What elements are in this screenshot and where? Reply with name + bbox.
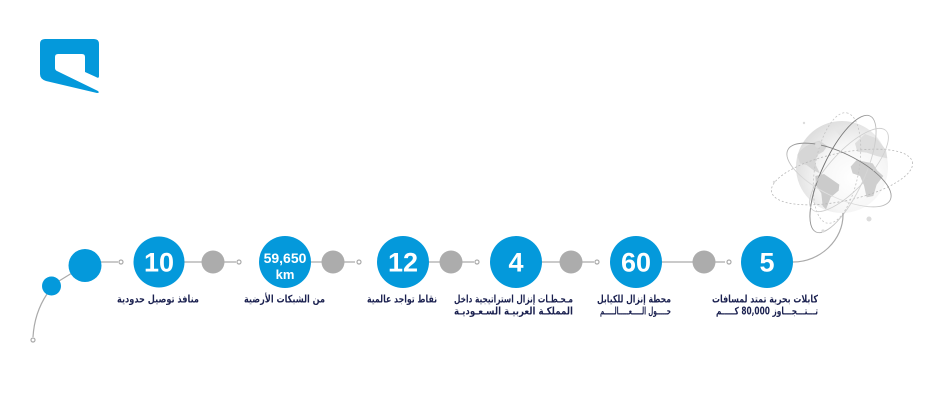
gray nodes [202,250,716,274]
stat: 60: محطة إنزال للكيابل [597,294,671,306]
stat: 4: 4 [508,248,524,278]
stat: 4 [454,236,573,318]
globe illustration [767,107,917,241]
stat: 60 [597,236,671,318]
stat: 5 [712,236,819,318]
connector: first circle to globe [793,213,843,262]
stat: 5: كابلات بحرية تمتد لمسافات [712,294,819,306]
stat: 59,650 km: km [276,267,294,282]
start node small [42,276,61,296]
stat: 10: منافذ توصيل حدودية [117,294,199,306]
globe sphere [796,121,888,213]
stat: 60: 60 [621,248,651,278]
connector: timeline [31,260,731,342]
continents [797,124,887,209]
start node large [68,249,102,282]
stat: 12: نقاط تواجد عالمية [367,294,437,306]
stat: 12: 12 [388,248,418,278]
stat: 5: 5 [759,248,775,278]
stat: 4: مـحـطـات إنزال استراتيجية داخل [454,294,573,306]
orbit nodes [773,122,872,233]
stat: 59,650 km [244,236,325,306]
logo [40,39,99,93]
stat: 59,650 km: 59,650 [264,250,307,266]
stat: 4: المملكـة العربيـة السـعـوديـة [454,306,573,318]
orbits [767,107,917,241]
stat: 60: حـــــول الـــــعـــــالـــــم [600,306,671,318]
stat: 10: 10 [144,248,174,278]
stat: 12 [367,236,437,306]
stat: 5: تـــتـــجـــاوز 80,000 كـــــم [716,306,818,318]
stat: 10 [117,236,199,306]
stat: 59,650 km: من الشبكات الأرضية [244,292,325,306]
